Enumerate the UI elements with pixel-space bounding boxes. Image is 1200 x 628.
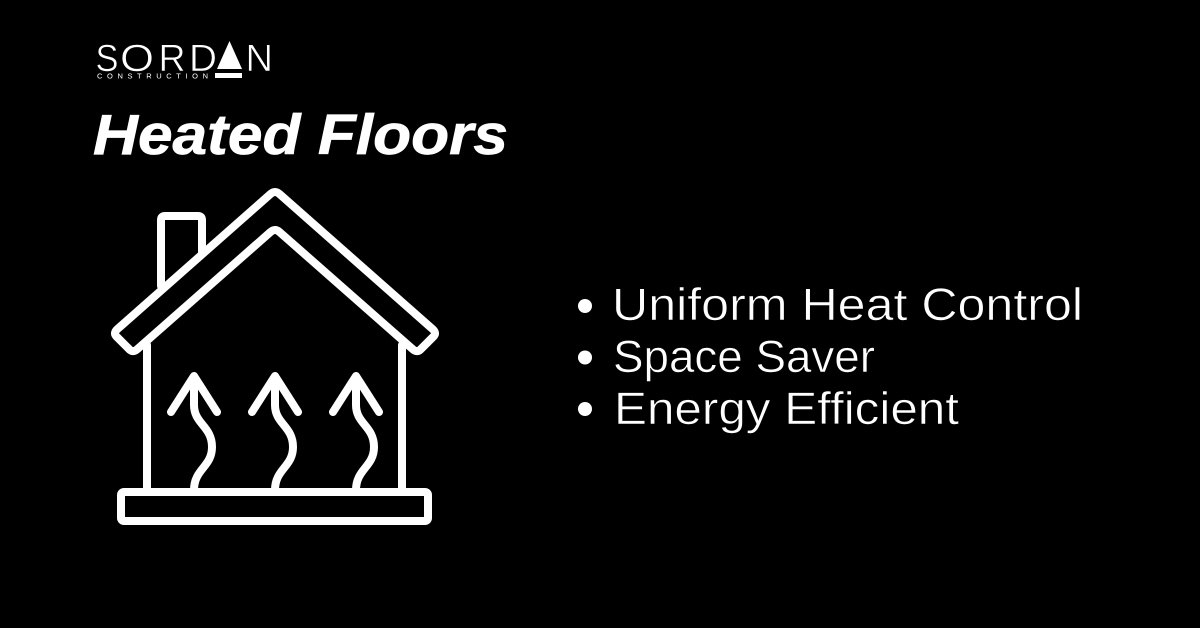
logo wordmark: S [96, 38, 118, 80]
logo wordmark: O [120, 38, 154, 80]
chimney [161, 216, 202, 286]
title: Heated Floors [93, 103, 508, 167]
icon: house with rising heat [115, 192, 435, 521]
heat arrow 1 [171, 376, 217, 490]
logo wordmark: N [246, 38, 273, 80]
heat arrow 3 [333, 376, 379, 490]
bullet list [578, 279, 1083, 434]
logo triangle A [217, 41, 242, 69]
heat arrow 2 [252, 376, 298, 490]
logo wordmark [96, 38, 273, 80]
walls [147, 345, 402, 492]
logo wordmark: D [189, 38, 217, 80]
floor slab [121, 492, 428, 521]
bullet: Energy Efficient: Energy Efficient [614, 383, 960, 434]
bullet: Uniform Heat Control: Uniform Heat Control [612, 279, 1083, 330]
logo subtitle: CONSTRUCTION [97, 72, 208, 80]
bullet: Space Saver: Space Saver [613, 331, 875, 382]
logo: Sordan Construction [96, 38, 273, 80]
roof [115, 192, 435, 351]
logo bar [215, 73, 242, 78]
logo wordmark: R [158, 38, 186, 80]
